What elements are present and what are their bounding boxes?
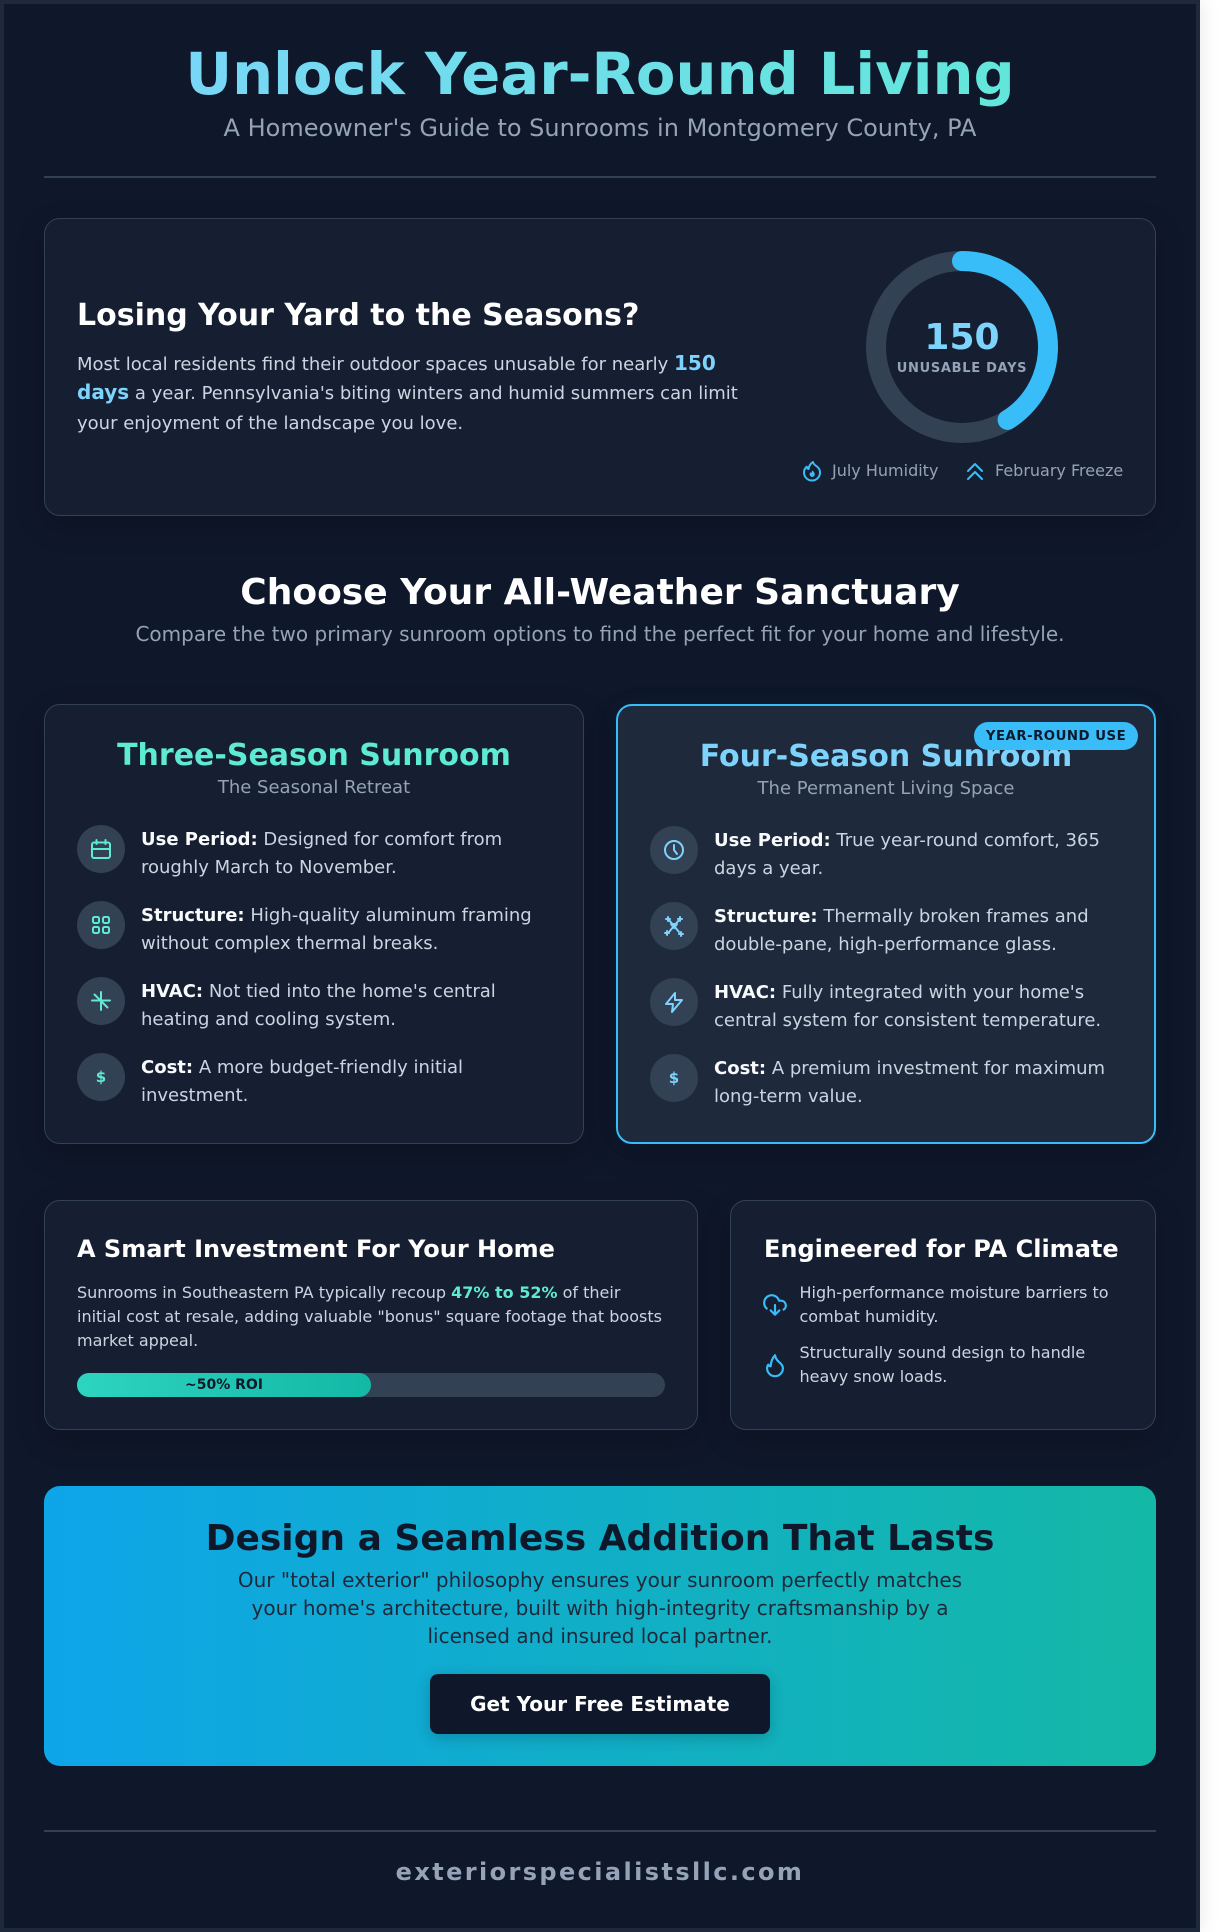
use period text: Use Period: Designed for comfort from [141, 829, 502, 850]
structure text [141, 905, 532, 954]
section heading: Choose Your All-Weather Sanctuary [240, 572, 960, 613]
use period text [714, 830, 1100, 879]
structure text: without complex thermal breaks. [141, 933, 438, 954]
cost text [141, 1057, 463, 1106]
snow load text [800, 1343, 1085, 1386]
four-season subheading: The Permanent Living Space [758, 778, 1014, 799]
title: Unlock Year-Round Living [185, 41, 1015, 108]
cost text: Cost: A more budget-friendly initial [141, 1057, 463, 1078]
legend: February Freeze: February Freeze [995, 461, 1123, 480]
use period text: days a year. [714, 858, 823, 879]
donut number: 150 [924, 317, 1000, 358]
icon: lightning bolt [650, 978, 698, 1026]
investment text: initial cost at resale, adding valuable "bonus" square footage that boosts [77, 1307, 662, 1326]
climate heading: Engineered for PA Climate [764, 1235, 1119, 1263]
footer url: exteriorspecialistsllc.com [396, 1858, 804, 1886]
hvac text: HVAC: Fully integrated with your home's [714, 982, 1084, 1003]
moisture text [800, 1283, 1109, 1326]
donut chart: 150 unusable days [866, 251, 1058, 443]
cta text: your home's architecture, built with high-integrity craftsmanship by a [252, 1596, 948, 1620]
icon: freeze chevrons [967, 463, 983, 480]
hero text: your enjoyment of the landscape you love. [77, 413, 463, 434]
ROI fill [77, 1373, 371, 1397]
panel: hero problem [44, 218, 1156, 516]
use period text [141, 829, 502, 878]
structure text [714, 906, 1089, 955]
title [0, 39, 1200, 111]
icon: calendar [77, 825, 125, 873]
section subheading: Compare the two primary sunroom options to find the perfect fit for your home and lifestyle. [135, 622, 1065, 646]
cost text: investment. [141, 1085, 248, 1106]
moisture text: High-performance moisture barriers to [800, 1283, 1109, 1302]
moisture text: combat humidity. [800, 1307, 938, 1326]
investment text: market appeal. [77, 1331, 198, 1350]
investment text [77, 1283, 662, 1350]
ROI progress bar [77, 1373, 665, 1397]
cta text [238, 1568, 962, 1648]
three-season subheading: The Seasonal Retreat [218, 777, 410, 798]
icon: clock [650, 826, 698, 874]
year-round badge [974, 722, 1138, 750]
panel: three-season [44, 704, 584, 1144]
cost text: Cost: A premium investment for maximum [714, 1058, 1105, 1079]
cost text: long-term value. [714, 1086, 863, 1107]
panel: climate [730, 1200, 1156, 1430]
cta button [430, 1674, 770, 1734]
cta heading: Design a Seamless Addition That Lasts [206, 1518, 994, 1559]
panel: investment [44, 1200, 698, 1430]
hvac text: HVAC: Not tied into the home's central [141, 981, 496, 1002]
snow load text: Structurally sound design to handle [800, 1343, 1085, 1362]
ROI fill: ~50% ROI [185, 1377, 263, 1393]
legend: July Humidity: July Humidity [832, 461, 938, 480]
hvac text: heating and cooling system. [141, 1009, 396, 1030]
use period text: Use Period: True year-round comfort, 365 [714, 830, 1100, 851]
panel: four-season [616, 704, 1156, 1144]
subtitle: A Homeowner's Guide to Sunrooms in Montgomery County, PA [224, 114, 976, 142]
hvac text: central system for consistent temperature. [714, 1010, 1101, 1031]
investment heading: A Smart Investment For Your Home [77, 1235, 555, 1263]
hero text: Most local residents find their outdoor spaces unusable for nearly 150 [77, 350, 716, 374]
icon: humidity flame [803, 461, 821, 482]
icon: dollar: $ [96, 1068, 106, 1086]
icon: dollar [77, 1053, 125, 1101]
cta text: Our "total exterior" philosophy ensures your sunroom perfectly matches [238, 1568, 962, 1592]
hvac text [714, 982, 1101, 1031]
investment text: Sunrooms in Southeastern PA typically recoup 47% to 52% of their [77, 1283, 620, 1302]
cta text: licensed and insured local partner. [427, 1624, 773, 1648]
use period text: roughly March to November. [141, 857, 397, 878]
icon: snow asterisk [77, 977, 125, 1025]
structure text: Structure: Thermally broken frames and [714, 906, 1089, 927]
hero heading: Losing Your Yard to the Seasons? [77, 298, 639, 333]
icon: dollar: $ [669, 1069, 679, 1087]
hero text: days a year. Pennsylvania's biting winters and humid summers can limit [77, 380, 738, 404]
structure text: Structure: High-quality aluminum framing [141, 905, 532, 926]
snow load text: heavy snow loads. [800, 1367, 947, 1386]
hero text [77, 350, 738, 434]
icon: flame [766, 1354, 784, 1378]
icon: cloud download [763, 1294, 787, 1316]
three-season heading: Three-Season Sunroom [117, 738, 511, 773]
donut label: UNUSABLE DAYS [897, 361, 1027, 376]
icon: grid [77, 901, 125, 949]
icon: frame break [650, 902, 698, 950]
cta button: Get Your Free Estimate [470, 1692, 730, 1716]
panel: call to action [44, 1486, 1156, 1766]
year-round badge: YEAR-ROUND USE [986, 729, 1126, 744]
hvac text [141, 981, 496, 1030]
four-season heading: Four-Season Sunroom [700, 738, 1072, 774]
icon: dollar [650, 1054, 698, 1102]
structure text: double-pane, high-performance glass. [714, 934, 1057, 955]
cost text [714, 1058, 1105, 1107]
